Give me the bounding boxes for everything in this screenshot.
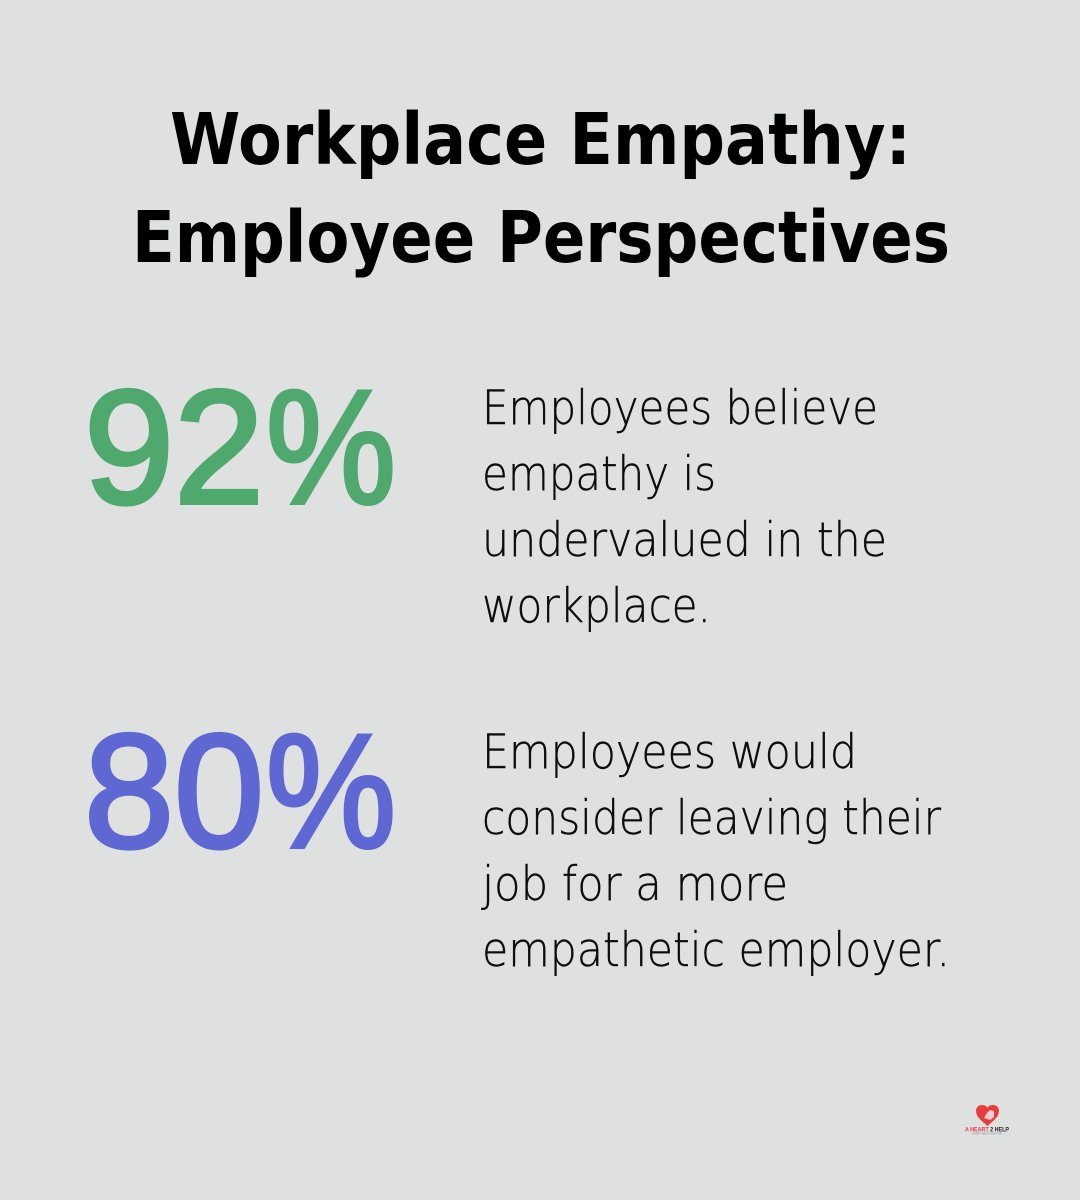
stat: 92% xyxy=(84,357,396,538)
text: 92% description: Employees believe xyxy=(482,381,878,436)
logo wordmark: A HEART 2 HELP xyxy=(965,1128,1009,1134)
text: 80% description: Employees would xyxy=(482,725,857,780)
stat: 80%: 80 xyxy=(84,701,264,882)
stat: 80%: % xyxy=(266,701,396,882)
title xyxy=(132,98,950,279)
text: 92% description xyxy=(482,381,887,634)
text: 80% description: job for a more xyxy=(481,857,788,912)
text: 92% description: undervalued in the xyxy=(482,513,887,568)
logo tagline: EVERY HELPS MATTER xyxy=(972,1132,1002,1136)
text: 80% description xyxy=(481,725,950,978)
text: 92% description: workplace. xyxy=(482,579,711,634)
stat: 80% xyxy=(84,701,396,882)
text: 92% description: empathy is xyxy=(482,447,716,502)
title: Employee Perspectives xyxy=(132,196,950,279)
icon: heart xyxy=(976,1105,999,1126)
logo: A Heart 2 Help xyxy=(965,1105,1009,1136)
stat: 92%: 92 xyxy=(84,357,264,538)
stat: 92%: % xyxy=(266,357,396,538)
title: Workplace Empathy: xyxy=(170,98,911,181)
text: 80% description: consider leaving their xyxy=(482,791,941,846)
text: 80% description: empathetic employer. xyxy=(482,923,950,978)
